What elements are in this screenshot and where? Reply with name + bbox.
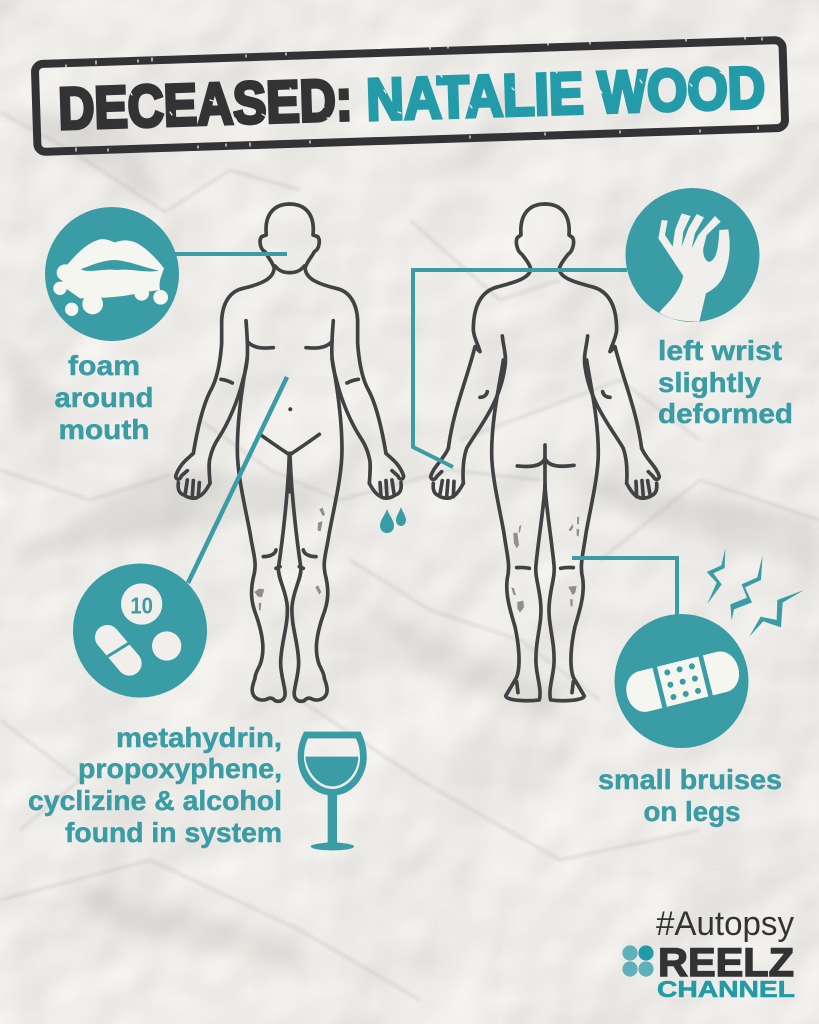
label: left wrist slightly deformed <box>658 335 793 429</box>
icon: pills <box>73 564 207 698</box>
icon: bandage <box>614 614 748 748</box>
label: left wrist slightly deformed: deformed <box>658 398 793 429</box>
label: foam around mouth: around <box>54 382 154 413</box>
label: foam around mouth: mouth <box>58 414 150 445</box>
logo word: CHANNEL: CHANNEL <box>657 976 795 1002</box>
connector: bruises to legs <box>572 558 677 616</box>
icon: pain bolts <box>707 549 804 637</box>
title: deceased: DECEASED: <box>57 67 353 142</box>
label: drugs found in system: found in system <box>65 817 282 848</box>
label: left wrist slightly deformed: left wrist <box>658 335 782 366</box>
icon: water drops from hand <box>380 507 406 533</box>
label: drugs found in system: metahydrin, <box>116 722 282 753</box>
figure: body back view <box>431 204 659 701</box>
label: drugs found in system: propoxyphene, <box>78 753 282 784</box>
label: drugs found in system <box>28 722 282 848</box>
hashtag: #Autopsy: #Autopsy <box>656 905 794 943</box>
label: foam around mouth: foam <box>68 350 140 381</box>
label: small bruises on legs: small bruises <box>598 764 782 795</box>
icon: deformed hand <box>626 188 760 322</box>
label: small bruises on legs <box>598 764 782 827</box>
logo: Reelz Channel <box>622 941 795 1002</box>
connector: wrist to hand <box>413 270 627 467</box>
icon: foaming lips <box>45 207 179 341</box>
title: name: NATALIE WOOD <box>365 54 766 133</box>
connector: foam to mouth <box>175 252 287 256</box>
figure: body front view <box>176 204 404 701</box>
stamp frame <box>35 40 785 152</box>
title stamp <box>35 37 785 152</box>
icon: wine glass <box>298 732 367 850</box>
connector: drugs to stomach <box>188 377 287 583</box>
label: foam around mouth <box>54 350 154 445</box>
logo dots <box>622 945 654 977</box>
logo word: REELZ: REELZ <box>658 941 794 985</box>
stamp distress specks <box>66 37 762 151</box>
icon: pills: 10 <box>130 593 153 619</box>
label: left wrist slightly deformed: slightly <box>658 367 761 398</box>
label: small bruises on legs: on legs <box>644 796 740 827</box>
label: drugs found in system: cyclizine & alcohol <box>28 785 282 816</box>
